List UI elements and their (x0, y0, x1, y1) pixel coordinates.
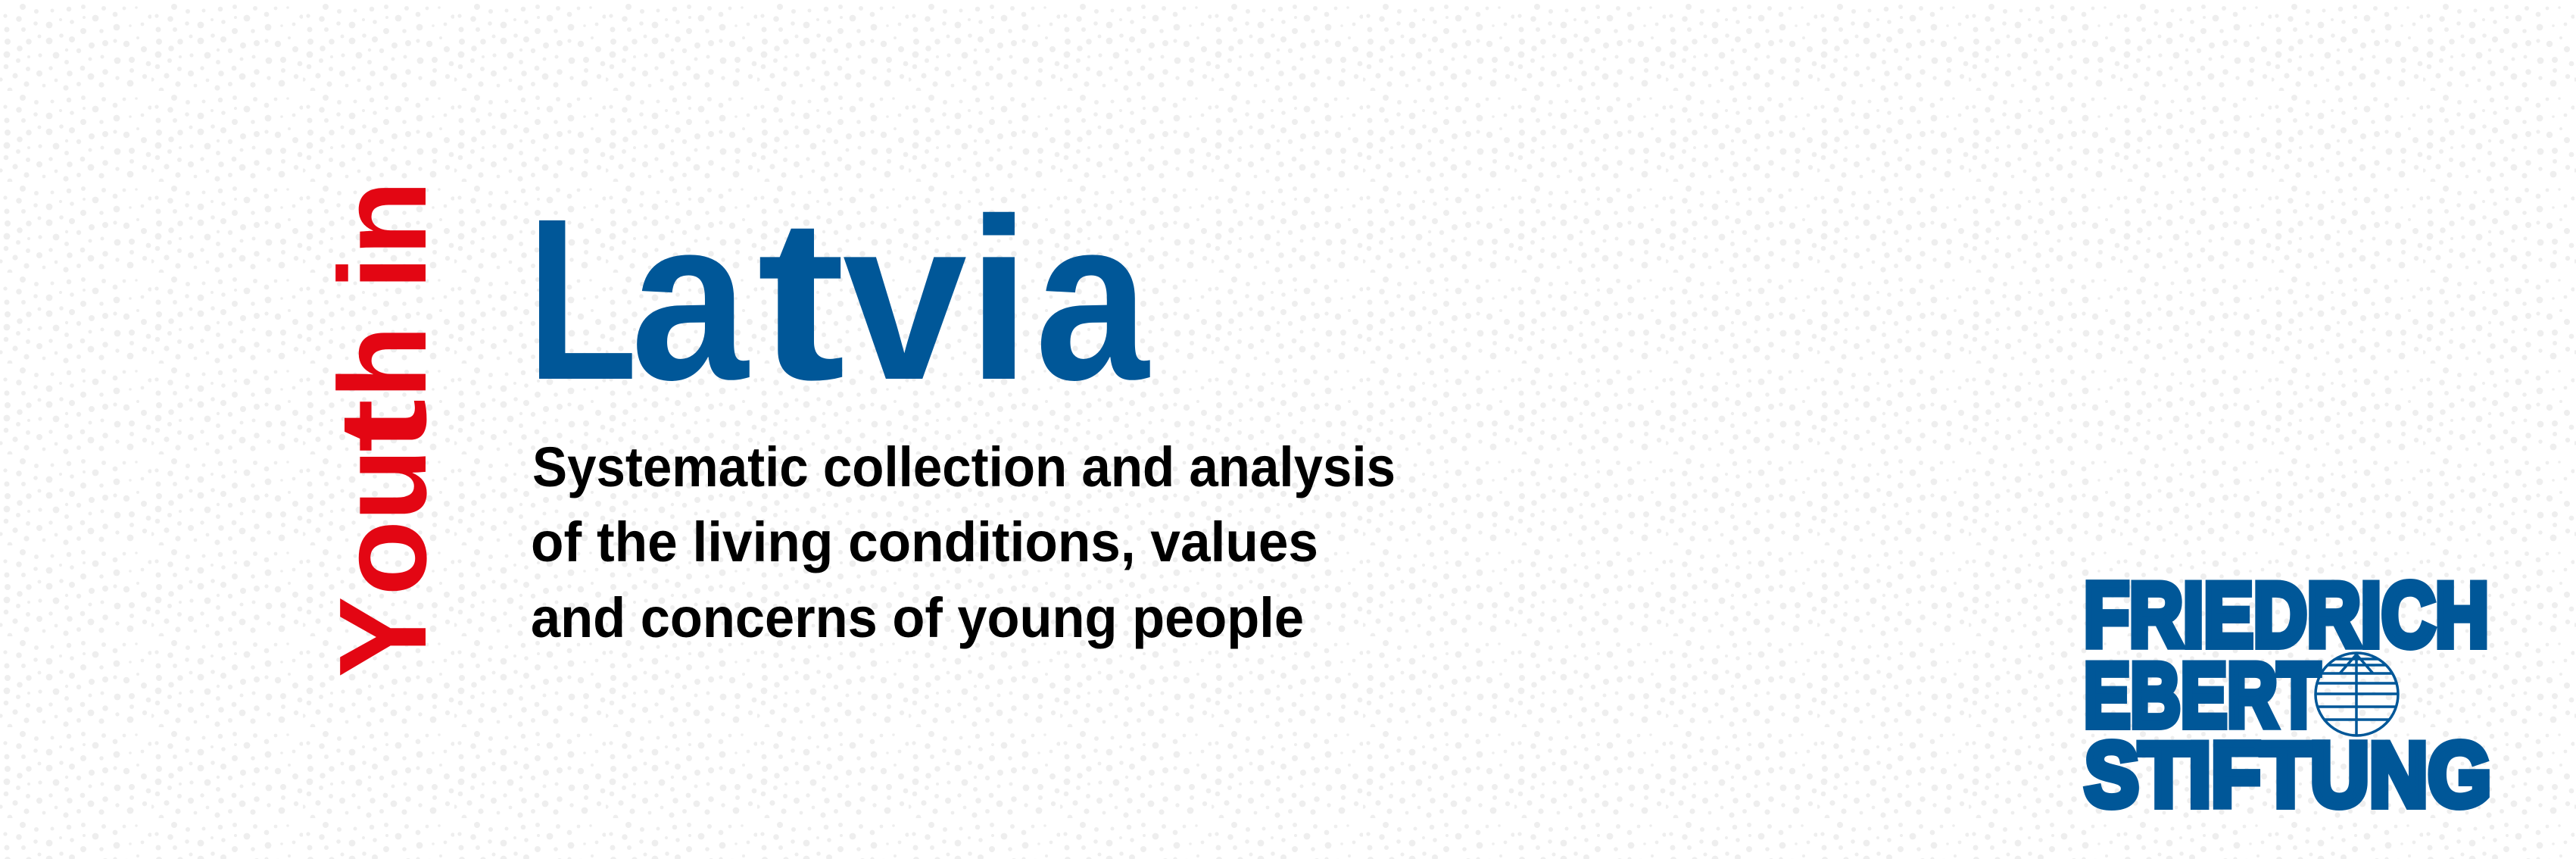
rotated label: Youth in: i (313, 255, 452, 290)
title: Latvia: t (757, 171, 845, 428)
rotated label: Youth in: o (313, 520, 452, 596)
title: Latvia: a (631, 171, 750, 428)
rotated label: Youth in: n (313, 180, 452, 256)
rotated label: Youth in: u (313, 448, 452, 521)
title: Latvia: L (527, 171, 638, 428)
logo word: Friedrich: FRIEDRICH (2084, 564, 2489, 666)
subtitle text block: of the living conditions, values (531, 511, 1318, 573)
logo word: Stiftung: STIFTUNG (2085, 724, 2491, 826)
logo word: Ebert: EBERT (2084, 645, 2320, 746)
subtitle text block: Systematic collection and analysis (532, 436, 1396, 498)
title: Latvia: a (1035, 171, 1150, 428)
logo: Friedrich Ebert Stiftung (2082, 579, 2490, 811)
subtitle text block: and concerns of young people (531, 586, 1304, 649)
rotated label: Youth in: Y (313, 596, 452, 677)
subtitle text block (531, 436, 1396, 649)
title: Latvia: i (967, 171, 1031, 428)
icon: globe (2309, 651, 2404, 737)
rotated label: Youth in: h (313, 326, 452, 398)
title: Latvia: v (843, 171, 968, 428)
rotated label: Youth in: t (313, 398, 452, 452)
